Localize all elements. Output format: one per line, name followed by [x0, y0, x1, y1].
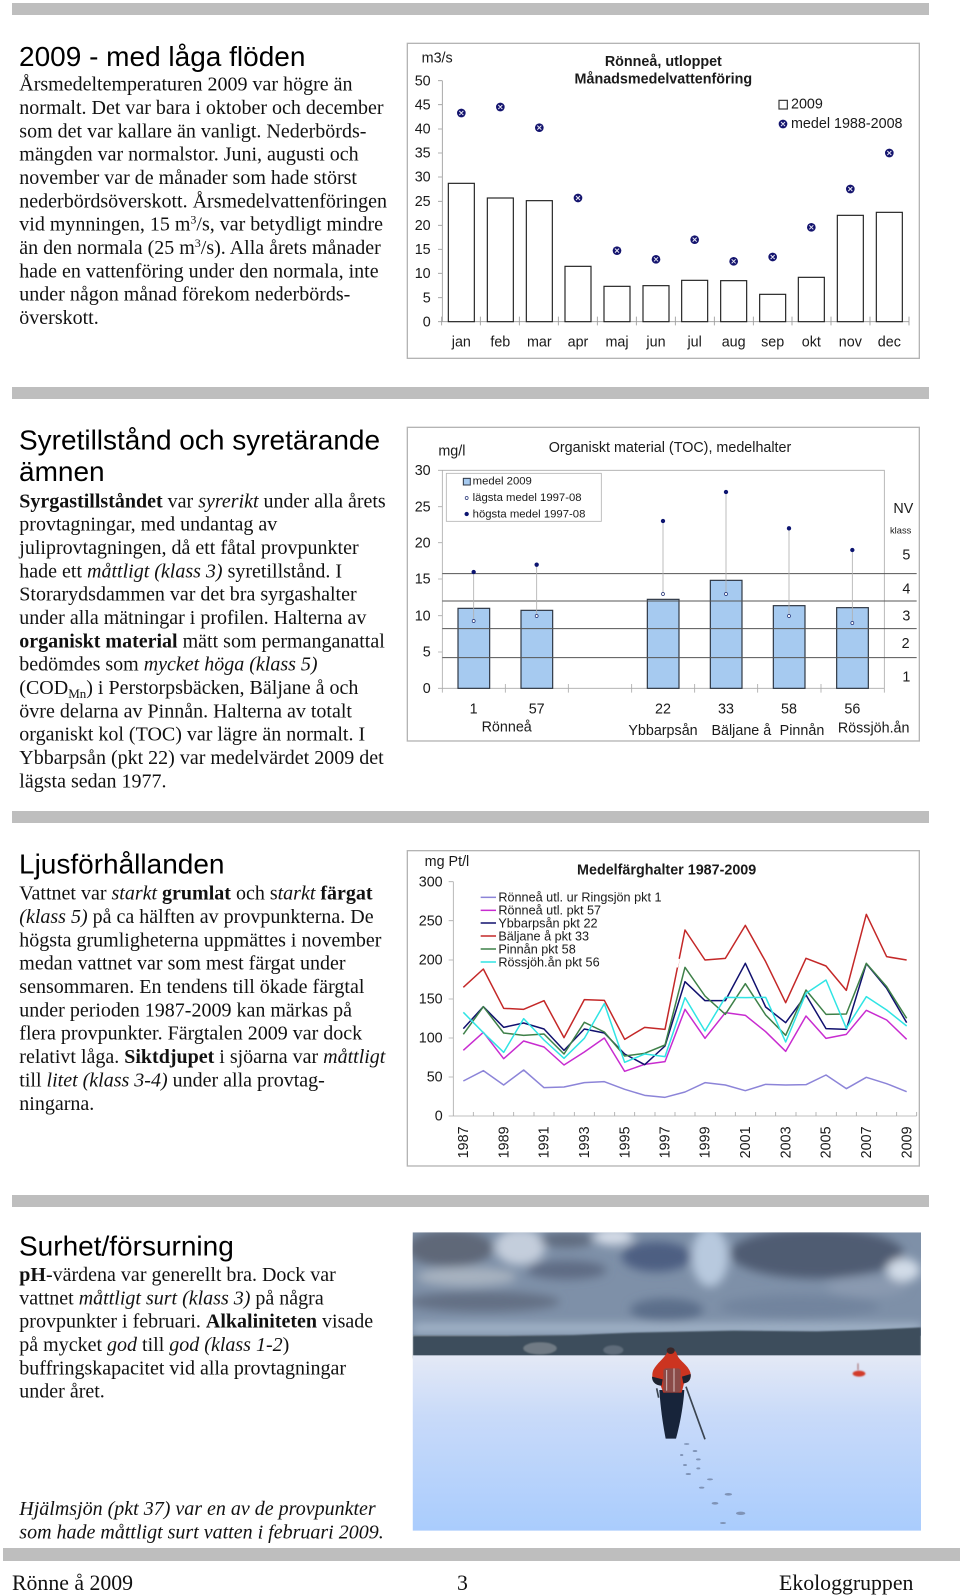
heading: Syretillstånd och syretärande ämnen: Syretillstånd och syretärande [19, 424, 380, 455]
body text: low flows: Årsmedeltemperaturen 2009 var högre än [19, 74, 353, 96]
month labels: dec [878, 335, 901, 351]
body text: low flows: /s). Alla årets månader [201, 237, 381, 259]
chart: organic material TOC [407, 427, 919, 741]
y axis labels: 40 [415, 122, 431, 138]
NV class labels: 3 [902, 608, 910, 624]
body text: oxygen and organic matter: lägsta sedan 1977. [19, 770, 166, 792]
legend: Bäljane å pkt 33 [498, 929, 589, 943]
NV class labels [890, 501, 914, 685]
y axis labels: 30 [415, 170, 431, 186]
body text: low flows: 3 [190, 213, 196, 227]
legend: Rönneå utl. ur Ringsjön pkt 1 [498, 891, 662, 905]
NV class labels: 4 [902, 581, 910, 597]
y axis labels: m3/s [422, 50, 453, 66]
body text: light conditions: under perioden 1987-2009 kan märkas på [19, 999, 352, 1021]
axis labels: 0 [423, 681, 431, 697]
y axis labels: 35 [415, 146, 431, 162]
year labels: 1987 [456, 1126, 472, 1158]
axis labels [419, 854, 469, 1125]
legend [481, 891, 662, 969]
body text: light conditions: till litet (klass 3-4) under alla provtag- [19, 1070, 325, 1092]
body text: low flows: överskott. [19, 307, 99, 329]
month labels: aug [722, 335, 746, 351]
panel: 2009 low flows text [19, 41, 387, 329]
chart: monthly mean water flow [407, 43, 919, 358]
panel: oxygen text [18, 424, 386, 792]
body text: low flows: som det var kallare än vanligt. Nederbörds- [19, 120, 366, 142]
footer: Rönne å 2009 [12, 1571, 133, 1595]
axis labels: 50 [427, 1070, 443, 1086]
year labels: 1995 [617, 1126, 633, 1158]
month labels: nov [839, 335, 863, 351]
year labels: 2005 [819, 1126, 835, 1158]
footer [12, 1571, 913, 1595]
y axis labels: 5 [423, 290, 431, 306]
NV class labels: 2 [902, 636, 910, 652]
station labels: 58 [781, 701, 797, 717]
month labels: jul [686, 335, 702, 351]
body text: low flows: normalt. Det var bara i oktober och december [19, 97, 384, 119]
section divider bar: light [12, 811, 929, 823]
legend: medel 2009 [473, 476, 532, 488]
axis labels: 10 [415, 608, 431, 624]
markers: mean 1988-2008 [457, 103, 894, 266]
heading: Surhet/försurning: Surhet/försurning [19, 1230, 234, 1261]
station labels: Bäljane å [711, 723, 771, 739]
body text: low flows: 3 [195, 236, 201, 250]
y axis labels [415, 50, 453, 330]
body text: oxygen and organic matter: provtagningar, med undantag av [19, 514, 277, 536]
section divider bar: oxygen [12, 387, 929, 399]
month labels: maj [605, 335, 629, 351]
axis labels: 15 [415, 572, 431, 588]
legend [446, 473, 601, 521]
range lines and markers [471, 490, 854, 624]
body text: oxygen and organic matter: hade ett måttligt (klass 3) syretillstånd. I [19, 560, 342, 582]
distant marker [853, 1363, 865, 1377]
body text: oxygen and organic matter: juliprovtagningen, då ett fåtal provpunkter [18, 537, 359, 559]
legend: Rössjöh.ån pkt 56 [498, 955, 600, 969]
axis labels: 300 [419, 874, 443, 890]
NV class labels: 5 [902, 548, 910, 564]
body text: light conditions: flera provpunkter. Färgtalen 2009 var dock [19, 1023, 362, 1045]
y axis labels: 25 [415, 194, 431, 210]
section divider bar: acidity [12, 1195, 929, 1207]
year labels: 1991 [537, 1126, 553, 1158]
year labels: 2003 [778, 1126, 794, 1158]
heading: Syretillstånd och syretärande ämnen [19, 424, 380, 487]
photo: person walking on frozen lake [407, 1227, 921, 1532]
photo caption [18, 1498, 384, 1543]
axis labels: 100 [419, 1031, 443, 1047]
legend: 2009 [791, 97, 823, 113]
NV class labels: klass [890, 526, 912, 536]
heading: 2009 - med låga flöden: 2009 - med låga flöden [19, 41, 305, 72]
body text: light conditions: Vattnet var starkt grumlat och starkt färgat [19, 882, 373, 904]
chart title: Månadsmedelvattenföring [575, 71, 752, 87]
body text: acidity: på mycket god till god (klass 1-2) [19, 1334, 289, 1356]
panel: acidity text [18, 1230, 384, 1543]
station labels: Pinnån [780, 723, 824, 739]
axis labels: 20 [415, 535, 431, 551]
chart title: Organiskt material (TOC), medelhalter [549, 440, 792, 456]
legend: Rönneå utl. pkt 57 [498, 904, 601, 918]
photo caption: Hjälmsjön (pkt 37) var en av de provpunkter [18, 1498, 376, 1520]
body text: oxygen and organic matter: Syrgastillståndet var syrerikt under alla årets [19, 490, 386, 512]
sky [407, 1227, 921, 1336]
chart title: Medelfärghalter 1987-2009 [577, 863, 756, 879]
month labels: mar [527, 335, 552, 351]
year labels: 1997 [658, 1126, 674, 1158]
month labels: feb [490, 335, 510, 351]
station labels: 33 [718, 701, 734, 717]
body text: oxygen and organic matter: ) i Perstorpsbäcken, Bäljane å och [86, 677, 358, 699]
axes and ticks [449, 882, 917, 1116]
body text: oxygen and organic matter: bedömdes som mycket höga (klass 5) [19, 654, 318, 676]
body text: light conditions: sensommaren. En tendens till ökade färgtal [19, 976, 365, 998]
y axis labels: 10 [415, 266, 431, 282]
photo caption: som hade måttligt surt vatten i februari 2009. [19, 1521, 384, 1543]
footer: 3 [457, 1571, 468, 1595]
station labels: 22 [655, 701, 671, 717]
bars: mean 2009 [458, 580, 868, 688]
year labels: 2007 [859, 1126, 875, 1158]
body text: light conditions: relativt låga. Siktdjupet i sjöarna var måttligt [19, 1046, 386, 1068]
axis labels: 25 [415, 499, 431, 515]
station labels: 57 [529, 701, 545, 717]
month labels: apr [568, 335, 589, 351]
axes and ticks [438, 81, 909, 325]
year labels: 1989 [496, 1126, 512, 1158]
axis labels: 250 [419, 913, 443, 929]
snow [413, 1355, 921, 1532]
section divider bar: top [12, 3, 929, 15]
body text: oxygen and organic matter: Mn [68, 686, 87, 701]
body text: light conditions: högsta grumligheterna uppmättes i november [19, 929, 382, 951]
body text: light conditions: medan vattnet var som mest färgat under [19, 953, 346, 975]
y axis labels: 15 [415, 242, 431, 258]
station labels: Rönneå [482, 720, 532, 736]
footer bar [3, 1548, 960, 1561]
legend: högsta medel 1997-08 [473, 508, 585, 520]
body text: acidity [19, 1264, 373, 1403]
body text: acidity: under året. [19, 1381, 105, 1403]
legend [779, 97, 903, 132]
month labels: okt [802, 335, 821, 351]
station labels [470, 701, 910, 739]
body text: oxygen and organic matter: Storarydsdammen var det bra syrgashalter [19, 584, 357, 606]
month labels: jun [645, 335, 666, 351]
legend: lägsta medel 1997-08 [473, 492, 582, 504]
year labels: 1993 [577, 1126, 593, 1158]
month labels: sep [761, 335, 784, 351]
body text: acidity: provpunkter i februari. Alkaliniteten visade [19, 1311, 373, 1333]
heading: Ljusförhållanden: Ljusförhållanden [19, 848, 224, 879]
body text: oxygen and organic matter: Ybbarpsån (pkt 22) var medelvärdet 2009 det [19, 747, 384, 769]
axis labels: 30 [415, 463, 431, 479]
NV class labels: 1 [902, 669, 910, 685]
year labels [456, 1126, 915, 1158]
year labels: 2009 [899, 1126, 915, 1158]
body text: low flows: än den normala (25 m [19, 237, 195, 259]
body text: oxygen and organic matter [18, 490, 386, 792]
line series [463, 914, 907, 1097]
body text: oxygen and organic matter: under alla mätningar i profilen. Halterna av [19, 607, 366, 629]
body text: low flows: under någon månad förekom nederbörds- [19, 284, 350, 306]
station labels: 1 [470, 701, 478, 717]
body text: low flows: vid mynningen, 15 m [19, 214, 190, 236]
y axis labels: 50 [415, 73, 431, 89]
body text: low flows: november var de månader som hade störst [19, 167, 357, 189]
body text: acidity: vattnet måttligt surt (klass 3) på några [19, 1287, 324, 1309]
station labels: Rössjöh.ån [838, 721, 910, 737]
body text: light conditions: ningarna. [19, 1093, 94, 1115]
body text: light conditions: (klass 5) på ca hälften av provpunkterna. De [19, 906, 374, 928]
body text: oxygen and organic matter: organiskt kol (TOC) var lägre än normalt. I [19, 724, 365, 746]
y axis labels: 20 [415, 218, 431, 234]
month labels: jan [451, 335, 471, 351]
heading: Syretillstånd och syretärande ämnen: ämnen [19, 456, 105, 487]
axis labels: 0 [435, 1109, 443, 1125]
person [652, 1347, 705, 1439]
NV class labels: NV [893, 501, 914, 517]
axis labels: mg/l [438, 444, 465, 460]
legend: Pinnån pkt 58 [498, 942, 576, 956]
body text: light conditions [19, 882, 386, 1115]
tree line [413, 1327, 921, 1358]
body text: low flows: mängden var normalstor. Juni, augusti och [19, 144, 359, 166]
body text: low flows [19, 74, 387, 329]
class boundary lines [442, 574, 917, 658]
axis labels: mg Pt/l [425, 854, 469, 870]
footer: Ekologgruppen [779, 1571, 913, 1595]
body text: low flows: nederbördsöverskott. Årsmedelvattenföringen [19, 190, 387, 212]
axis labels: 5 [423, 645, 431, 661]
y axis labels: 0 [423, 314, 431, 330]
axis labels [415, 444, 465, 697]
axis labels: 150 [419, 992, 443, 1008]
body text: oxygen and organic matter: (COD [19, 677, 68, 699]
year labels: 1999 [698, 1126, 714, 1158]
footprints [680, 1443, 745, 1524]
chart title [575, 54, 752, 87]
bars: 2009 [448, 183, 902, 322]
axis labels: 200 [419, 953, 443, 969]
year labels: 2001 [738, 1126, 754, 1158]
legend: Ybbarpsån pkt 22 [498, 916, 598, 930]
chart title: Rönneå, utloppet [605, 54, 722, 70]
station labels: Ybbarpsån [628, 723, 698, 739]
station labels: 56 [844, 701, 860, 717]
y axis labels: 45 [415, 97, 431, 113]
legend: medel 1988-2008 [791, 116, 903, 132]
body text: low flows: hade en vattenföring under den normala, inte [19, 260, 379, 282]
body text: oxygen and organic matter: övre delarna av Pinnån. Halterna av totalt [19, 700, 352, 722]
body text: low flows: /s, var betydligt mindre [196, 214, 383, 236]
panel: light conditions text [19, 848, 386, 1115]
body text: oxygen and organic matter: organiskt material mätt som permanganattal [19, 630, 385, 652]
body text: acidity: pH-värdena var generellt bra. Dock var [19, 1264, 336, 1286]
plot frame and ticks [438, 470, 884, 693]
month labels [451, 335, 901, 351]
body text: acidity: buffringskapacitet vid alla provtagningar [19, 1357, 346, 1379]
chart: mean colour values 1987-2009 [407, 851, 919, 1166]
